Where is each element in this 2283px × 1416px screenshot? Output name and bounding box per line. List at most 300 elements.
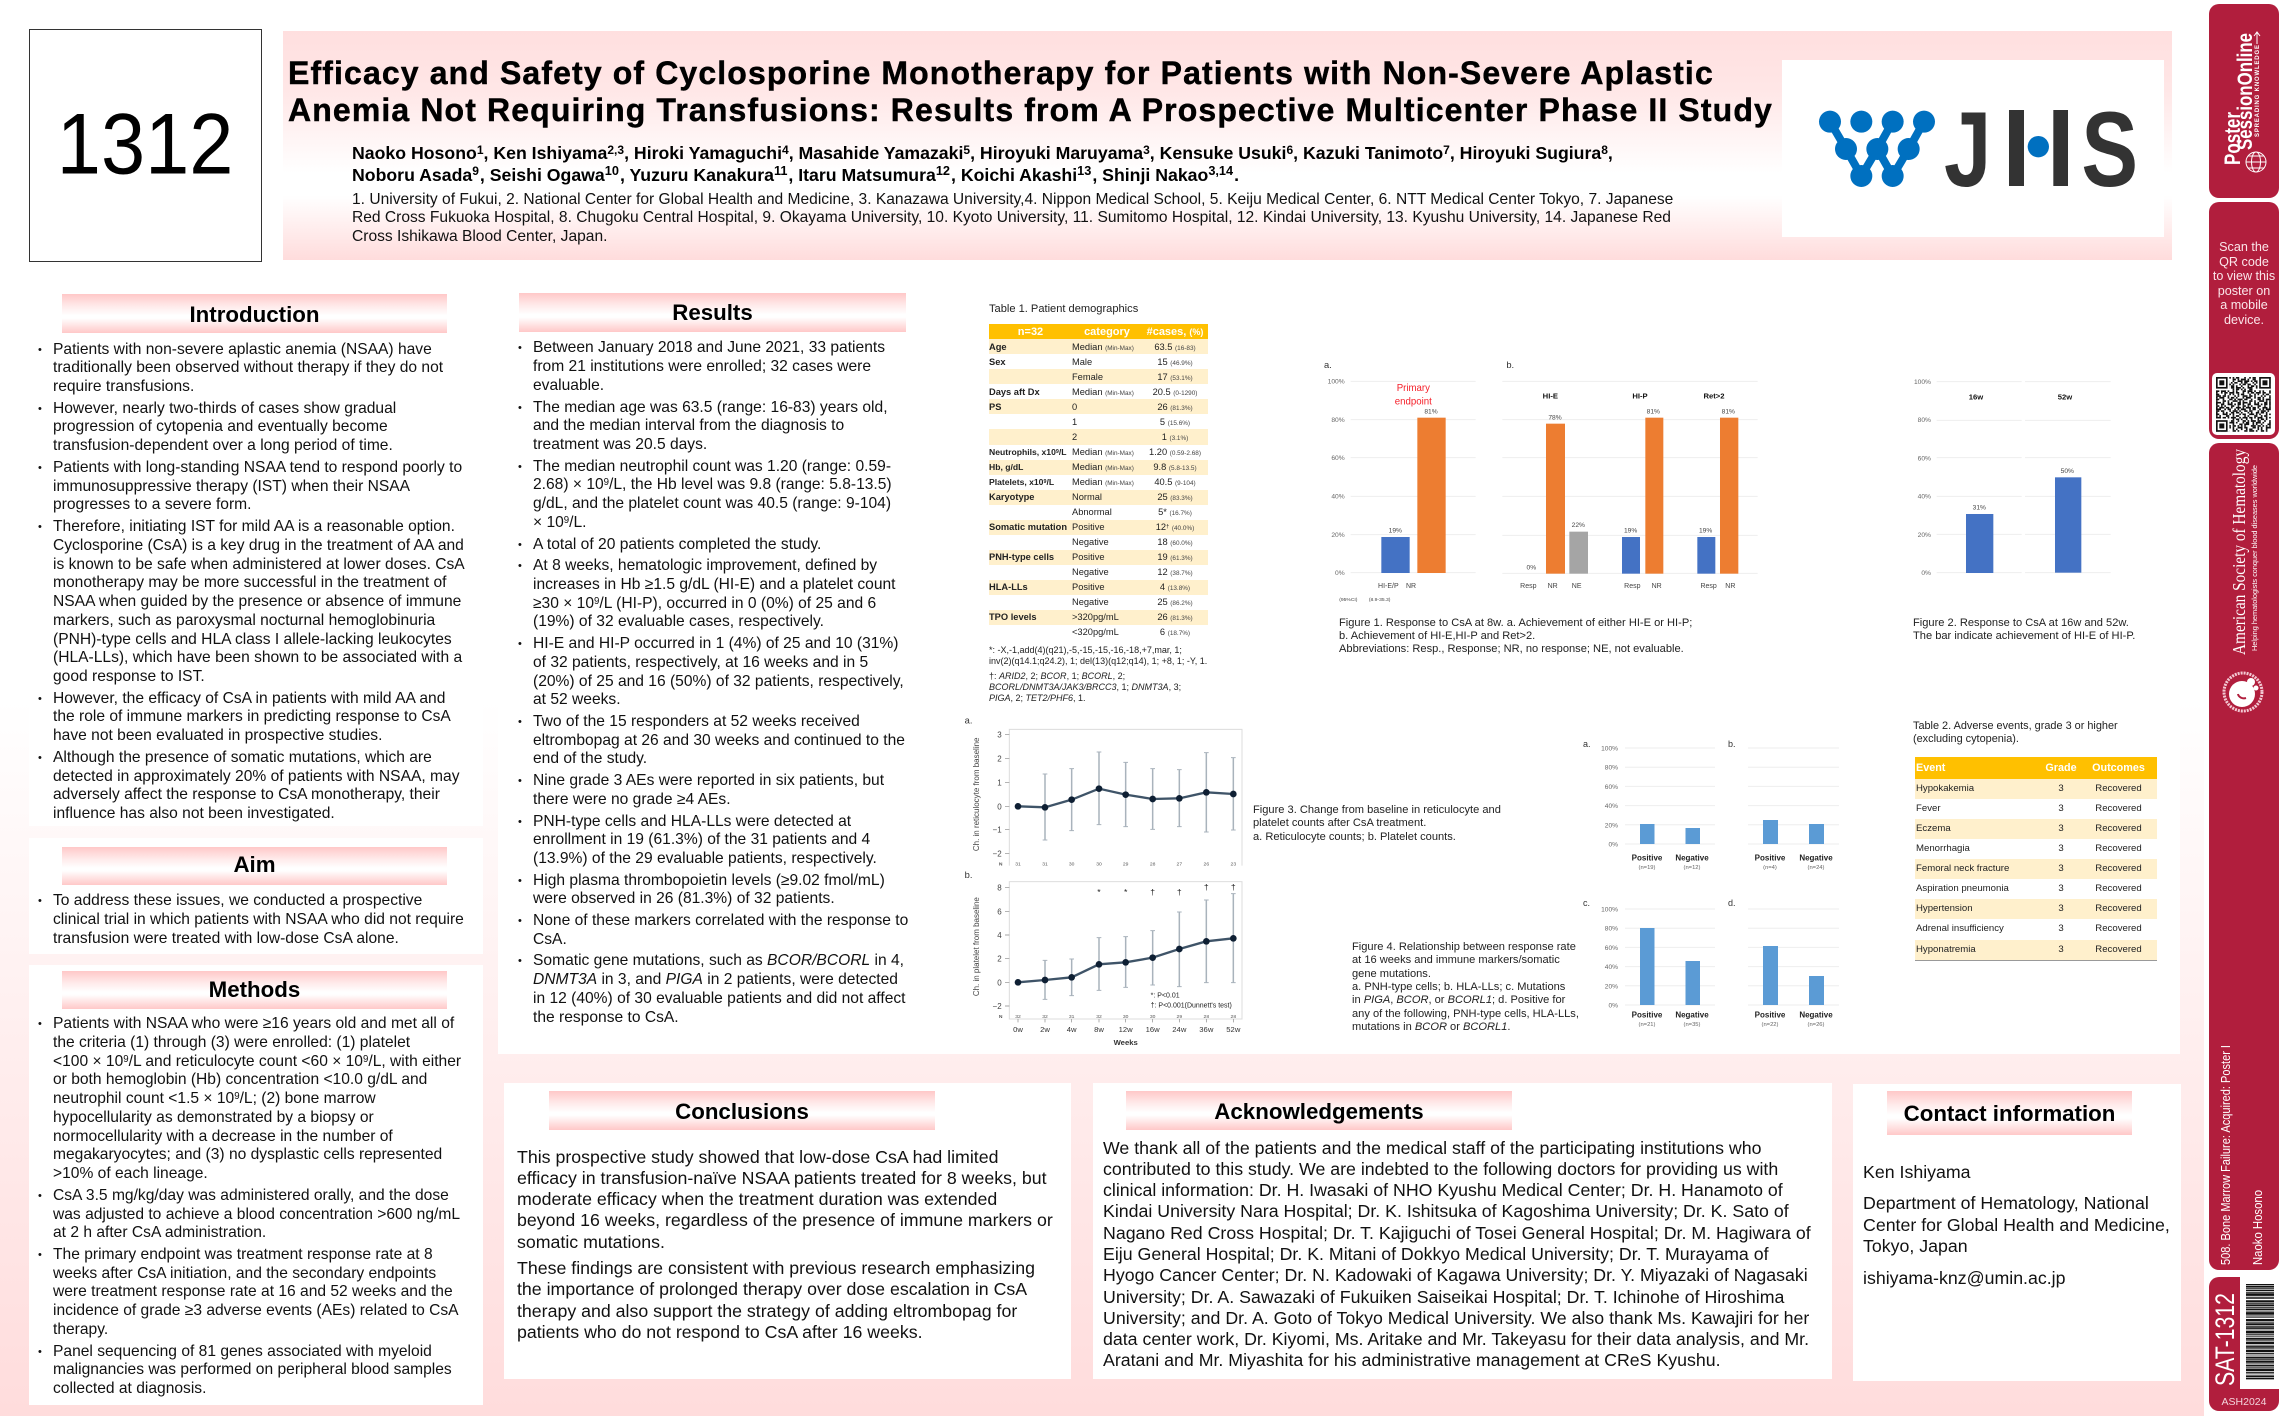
text: introduction bullets: Cyclosporine (CsA) is a key drug in the treatment of AA and (53, 537, 464, 554)
figure 4c: gene mutations response: c. (1583, 898, 1590, 908)
table 1: patient demographics: Median (Min-Max) (1072, 387, 1134, 397)
panel: conclusions (504, 1083, 1071, 1379)
sidebar: QR scan tab: to view this (2213, 269, 2275, 283)
table 1: patient demographics: 12† (40.0%) (1156, 522, 1194, 532)
figure 1a: primary endpoint bar chart: 80% (1331, 417, 1345, 424)
table 2: adverse events: 3 (2058, 903, 2064, 914)
text: methods bullets: therapy. (53, 1321, 108, 1338)
text: introduction bullets: have not been evaluated in prospective studies. (53, 727, 382, 744)
table 2 title (1913, 720, 2118, 745)
table 1: patient demographics: Karyotype (989, 492, 1034, 502)
icon: JHS logo: S (2081, 89, 2138, 209)
sidebar: American Society of Hematology tab: Naoko Hosono (2250, 1190, 2265, 1265)
table 1: patient demographics: 25 (86.2%) (1157, 597, 1193, 607)
text: results bullets: HI-E and HI-P occurred in 1 (4%) of 25 and 10 (31%) (533, 635, 898, 652)
text: methods bullets: megakaryocytes; and (3) no dysplastic cells represented (53, 1146, 442, 1163)
figure 3b: platelet change line chart: 52w (1226, 1025, 1241, 1034)
figure 3 caption: Figure 3. Change from baseline in reticulocyte and (1253, 804, 1501, 816)
figure 3a: reticulocyte change line chart: 30 (1069, 862, 1075, 868)
text: introduction bullets: markers, such as paroxysmal nocturnal hemoglobinuria (53, 612, 435, 629)
figure 2: response at 16w and 52w: 80% (1918, 417, 1931, 424)
text: introduction bullets: immunosuppressive therapy (IST) when their NSAA (53, 478, 410, 495)
figure 3a: reticulocyte change line chart: 28 (1150, 862, 1156, 868)
text: acknowledgements: Aratani and Mr. Miyashita for his administrative management at CReS Kyushu. (1103, 1350, 1721, 1370)
figure 3b: platelet change line chart: Weeks (1114, 1038, 1138, 1047)
figure 4b: HLA-LLs response (1728, 739, 1839, 871)
abstract number box: 1312 (57, 97, 234, 193)
text: conclusions: therapy and also support the strategy of adding eltrombopag for (517, 1301, 1017, 1321)
text: results bullets: g/dL, and the platelet count was 40.5 (range: 9-104) (533, 495, 891, 512)
text: results bullets: × 109/L. (533, 514, 587, 531)
figure 1a: primary endpoint bar chart: 19% (1389, 528, 1402, 535)
table 1: patient demographics: HLA-LLs (989, 582, 1028, 592)
figure 2: response at 16w and 52w (1914, 379, 2111, 577)
figure 3a: reticulocyte change line chart (965, 716, 1242, 868)
figure 3b: platelet change line chart: −2 (993, 1002, 1002, 1011)
text: results bullets: at 52 weeks. (533, 691, 621, 708)
table 1 footnotes: inv(2)(q14.1;q24.2), 1; del(13)(q12;q14), 1; +8, 1; -Y, 1. †: ARID2, 2; BCOR, 1; BCORL, 2; (989, 656, 1207, 681)
figure 3b: platelet change line chart: 32 (1042, 1014, 1048, 1020)
figure 1b: HI-E, HI-P, Ret>2 bar chart: NR (1725, 583, 1735, 590)
table 2: adverse events: Hypertension (1916, 903, 1973, 914)
figure 1b: HI-E, HI-P, Ret>2 bar chart: Resp (1701, 583, 1717, 590)
text: contact details: Ken Ishiyama Department of Hematology, National (1863, 1162, 2149, 1213)
text: results bullets: (20%) of 25 and 16 (50%) of 32 patients, respectively, (533, 673, 904, 690)
text: acknowledgements: University; Dr. A. Sawazaki of Fukuiken Saiseikai Hospital; Dr. T. Ichinohe of Hiroshima (1103, 1287, 1784, 1307)
text: results bullets: increases in Hb ≥1.5 g/dL (HI-E) and a platelet count (533, 576, 896, 593)
figure 2: response at 16w and 52w: 100% (1914, 379, 1931, 386)
title (288, 54, 1773, 128)
sidebar: American Society of Hematology tab: American Society of Hematology (2229, 449, 2249, 655)
text: introduction bullets: monotherapy may be more successful in the treatment of (53, 574, 446, 591)
sidebar: QR scan tab (2209, 202, 2279, 439)
heading: Methods (62, 971, 447, 1009)
table 2 title: (excluding cytopenia). (1913, 733, 2019, 745)
figure 3b: platelet change line chart: 30 (1150, 1014, 1156, 1020)
table 2: adverse events: Eczema (1916, 823, 1951, 834)
figure 4c: gene mutations response: Negative (1675, 1010, 1709, 1020)
table 1: patient demographics: 6 (18.7%) (1160, 627, 1190, 637)
table 1: patient demographics: 18 (60.0%) (1157, 537, 1193, 547)
figure 1b: HI-E, HI-P, Ret>2 bar chart: NR (1548, 583, 1558, 590)
table 1: patient demographics: Negative (1072, 567, 1109, 577)
sidebar: PosterSessionOnline tab: SPREADING KNOWLEDGE (2255, 45, 2261, 137)
text: introduction bullets: Patients with long-standing NSAA tend to respond poorly to (53, 459, 462, 476)
figure 3b: platelet change line chart: * (1124, 887, 1128, 897)
text: results bullets: CsA. (533, 931, 567, 948)
figure 3b: platelet change line chart: † (1150, 887, 1155, 897)
text: results bullets: treatment was 20.5 days. (533, 436, 707, 453)
text: methods bullets: incidence of grade ≥3 adverse events (AEs) related to CsA (53, 1302, 459, 1319)
sidebar: American Society of Hematology tab: 508. Bone Marrow Failure: Acquired: Poster I (2218, 1045, 2233, 1265)
text: results bullets: enrollment in 19 (61.3%) of the 31 patients and 4 (533, 831, 870, 848)
table 1: patient demographics: Neutrophils, x109/L (989, 447, 1066, 457)
text: results bullets: Between January 2018 and June 2021, 33 patients (533, 339, 885, 356)
table 1: patient demographics: Platelets, x109/L (989, 477, 1054, 487)
figure 4c: gene mutations response: (n=21) (1639, 1022, 1656, 1028)
figure 3b: platelet change line chart: b. (965, 870, 972, 880)
figure 4c: gene mutations response: Positive (1632, 1010, 1663, 1020)
table 1: patient demographics: Positive (1072, 522, 1105, 532)
table 2: adverse events: Recovered (2095, 823, 2142, 834)
table 2: adverse events: Grade (2045, 762, 2077, 774)
text: results bullets: Two of the 15 responders at 52 weeks received (533, 713, 860, 730)
figure 1b: HI-E, HI-P, Ret>2 bar chart: Ret>2 (1703, 392, 1725, 401)
text: introduction bullets: progression of cytopenia and eventually become (53, 418, 388, 435)
figure 3b: platelet change line chart: N (999, 1014, 1003, 1020)
figure 4c: gene mutations response: 60% (1605, 945, 1618, 952)
table 1: patient demographics: 1 (1072, 417, 1077, 427)
text: acknowledgements: University; and Dr. A. Goto of Tokyo Medical University. We also thank Ms. Kawajiri for her (1103, 1308, 1809, 1328)
text: results bullets: evaluable. (533, 377, 604, 394)
figure 1a: primary endpoint bar chart: 0% (1335, 570, 1345, 577)
text: introduction bullets: require transfusions. (53, 378, 194, 395)
table 2: adverse events: 3 (2058, 944, 2064, 954)
figure 3b: platelet change line chart: 28 (1231, 1014, 1236, 1020)
icon: QR code (2216, 377, 2271, 432)
table 1: patient demographics: <320pg/mL (1072, 627, 1119, 637)
figure 3a: reticulocyte change line chart: 3 (997, 731, 1002, 740)
table 1: patient demographics: 2 (1072, 432, 1077, 442)
heading: Acknowledgements (1126, 1091, 1512, 1130)
figure 1b: HI-E, HI-P, Ret>2 bar chart: NE (1572, 583, 1582, 590)
figure 4a: PNH-type cells response: Negative (1675, 854, 1709, 862)
table 2: adverse events: Recovered (2095, 803, 2142, 814)
table 1: patient demographics: PS (989, 402, 1001, 412)
figure 3b: platelet change line chart: 2 (997, 955, 1002, 964)
figure 1a: primary endpoint bar chart: a. (1324, 360, 1332, 370)
figure 1a: primary endpoint bar chart: HI-E/P (1378, 583, 1399, 590)
table 2: adverse events: Fever (1916, 803, 1941, 814)
table 2: adverse events: Recovered (2095, 783, 2142, 794)
panel: contact information (1853, 1084, 2181, 1381)
table 2: adverse events: Menorrhagia (1916, 843, 1970, 854)
text: acknowledgements: We thank all of the patients and the medical staff of the participating institutions who (1103, 1138, 1761, 1158)
text: results bullets: ≥30 × 109/L (HI-P), occurred in 0 (0%) of 25 and 6 (533, 595, 876, 612)
figure 4a: PNH-type cells response: a. (1583, 739, 1591, 749)
figure 1b: HI-E, HI-P, Ret>2 bar chart: 19% (1624, 528, 1637, 535)
text: results bullets: from 21 institutions were enrolled; 32 cases were (533, 358, 871, 375)
text: methods bullets: >10% of each lineage. (53, 1165, 208, 1182)
text: methods bullets: weeks after CsA initiation, and the secondary endpoints (53, 1265, 436, 1282)
text: methods bullets: normocellularity with a decrease in the number of (53, 1128, 393, 1145)
figure 1 caption: Abbreviations: Resp., Response; NR, no response; NE, not evaluable. (1339, 643, 1684, 655)
figure 3a: reticulocyte change line chart: a. (965, 716, 972, 726)
text: contact details (1863, 1162, 2170, 1288)
figure 3b: platelet change line chart: 2w (1040, 1025, 1050, 1034)
text: methods bullets: The primary endpoint was treatment response rate at 8 (53, 1246, 433, 1263)
figure 4c: gene mutations response: 20% (1605, 984, 1618, 990)
figure 1b: HI-E, HI-P, Ret>2 bar chart: HI-P (1632, 392, 1648, 401)
text: methods bullets: were treatment response rate at 16 and 52 weeks and the (53, 1283, 453, 1300)
text: acknowledgements: Kindai University Nara Hospital; Dr. K. Ishitsuka of Kagoshima University; Dr. K. Sato of (1103, 1201, 1789, 1221)
table 2: adverse events: Hypokakemia (1916, 783, 1974, 794)
text: methods bullets: hypocellularity as demonstrated by a biopsy or (53, 1109, 374, 1126)
table 2: adverse events: 3 (2058, 823, 2064, 834)
icon: JHS logo (1819, 89, 2138, 209)
figure 2 caption: Figure 2. Response to CsA at 16w and 52w. (1913, 616, 2129, 628)
table 2: adverse events: 3 (2058, 863, 2064, 874)
text: results bullets: The median age was 63.5 (range: 16-83) years old, (533, 399, 888, 416)
figure 2 caption (1913, 616, 2135, 642)
table 1: patient demographics: PNH-type cells (989, 552, 1054, 562)
table 2: adverse events: Outcomes (2092, 762, 2145, 774)
figure 1b: HI-E, HI-P, Ret>2 bar chart: 81% (1722, 409, 1735, 416)
text: results bullets: DNMT3A in 3, and PIGA in 2 patients, were detected (533, 971, 898, 988)
authors (352, 143, 1613, 184)
figure 3b: platelet change line chart (965, 870, 1242, 1047)
text: results bullets: 2.68) × 109/L, the Hb level was 9.8 (range: 5.8-13.5) (533, 476, 892, 493)
heading: Introduction: Introduction (189, 302, 320, 327)
text: results bullets (518, 339, 908, 1026)
table 1: patient demographics: Median (Min-Max) (1072, 447, 1134, 457)
figure 4d: any positive marker response: (n=26) (1808, 1022, 1825, 1028)
text: introduction bullets: traditionally been observed without therapy if they do not (53, 359, 443, 376)
sidebar: QR scan tab: Scan the (2219, 240, 2269, 254)
text: conclusions: efficacy in transfusion-naïve NSAA patients treated for 8 weeks, but (517, 1168, 1047, 1188)
figure 4c: gene mutations response (1583, 898, 1715, 1028)
figure 4 caption: any of the following, PNH-type cells, HLA-LLs, (1352, 1008, 1579, 1020)
figure 3b: platelet change line chart: † (1204, 882, 1209, 892)
table 1 title: Table 1. Patient demographics (989, 303, 1138, 315)
text: conclusions: This prospective study showed that low-dose CsA had limited (517, 1146, 998, 1166)
sidebar: QR scan tab: a mobile (2220, 298, 2268, 312)
figure 2: response at 16w and 52w: 52w (2058, 392, 2072, 401)
figure 1a: primary endpoint bar chart: endpoint (1395, 396, 1432, 407)
figure 2: response at 16w and 52w: 0% (1921, 570, 1931, 577)
sidebar: QR scan tab: poster on (2218, 284, 2270, 298)
figure 4a: PNH-type cells response: 40% (1605, 803, 1618, 810)
figure 4b: HLA-LLs response: (n=4) (1763, 865, 1777, 871)
heading: Contact information: Contact information (1904, 1101, 2115, 1126)
text: introduction bullets: progresses to a severe form. (53, 496, 251, 513)
figure 3a: reticulocyte change line chart: 31 (1015, 862, 1021, 868)
table 1: patient demographics: Normal (1072, 492, 1102, 502)
figure 4c: gene mutations response: 40% (1605, 964, 1618, 971)
text: introduction bullets: transfusion-dependent over a long period of time. (53, 437, 393, 454)
figure 3 caption: a. Reticulocyte counts; b. Platelet counts. (1253, 831, 1456, 843)
text: results bullets: (19%) of 32 evaluable cases, respectively. (533, 613, 824, 630)
figure 4c: gene mutations response: 80% (1605, 926, 1618, 932)
figure 2: response at 16w and 52w: 16w (1969, 392, 1983, 401)
table 2: adverse events: Recovered (2095, 843, 2142, 854)
figure 4d: any positive marker response: (n=22) (1762, 1022, 1779, 1028)
heading: Aim: Aim (233, 852, 276, 877)
sidebar: American Society of Hematology tab: Helping hematologists conquer blood diseases worldwide (2250, 465, 2259, 651)
table 1: patient demographics: Somatic mutation (989, 522, 1067, 532)
text: introduction bullets: influence has also not been investigated. (53, 805, 335, 822)
table 1: patient demographics: 40.5 (9-104) (1154, 477, 1196, 487)
table 1: patient demographics: Median (Min-Max) (1072, 342, 1134, 352)
figure 4b: HLA-LLs response: Positive (1755, 854, 1786, 862)
figure 1a: primary endpoint bar chart: 100% (1328, 379, 1345, 386)
text: methods bullets: neutrophil count <1.5 × 109/L; (2) bone marrow (53, 1090, 376, 1107)
icon: ASH seal (2224, 673, 2262, 711)
panel: aim (29, 838, 483, 954)
figure 4a: PNH-type cells response: (n=12) (1684, 865, 1701, 871)
icon: JHS logo: J (1944, 89, 1991, 209)
sidebar: session id and barcode: ASH2024 (2222, 1396, 2267, 1408)
figure 3b: platelet change line chart: 4w (1067, 1025, 1077, 1034)
text: results bullets: eltrombopag at 26 and 30 weeks and continued to the (533, 732, 905, 749)
figure 3b: platelet change line chart: 12w (1119, 1025, 1133, 1034)
text: results bullets: there were no grade ≥4 AEs. (533, 791, 731, 808)
panel: acknowledgements (1093, 1083, 1832, 1379)
table 2: adverse events: 3 (2058, 923, 2064, 934)
text: methods bullets: malignancies was performed on peripheral blood samples (53, 1361, 452, 1378)
figure 4 caption: gene mutations. (1352, 968, 1431, 980)
figure 4 caption: mutations in BCOR or BCORL1. (1352, 1021, 1510, 1033)
table 2: adverse events (1915, 757, 2157, 960)
table 2: adverse events: Recovered (2095, 863, 2142, 874)
text: conclusions: moderate efficacy when the treatment duration was extended (517, 1189, 997, 1209)
table 2: adverse events: Hyponatremia (1916, 944, 1976, 954)
table 2: adverse events: Recovered (2095, 903, 2142, 914)
heading: Results (519, 293, 906, 332)
text: acknowledgements: contributed to this study. We are indebted to the following doctors for providing us with (1103, 1159, 1778, 1179)
figure 3b: platelet change line chart: 29 (1177, 1014, 1182, 1020)
figure 2: response at 16w and 52w: 20% (1918, 532, 1931, 539)
figure 3a: reticulocyte change line chart: 0 (997, 802, 1002, 811)
text: methods bullets: <100 × 109/L and reticulocyte count <60 × 109/L, with either (53, 1053, 461, 1070)
table 1: patient demographics: 19 (61.3%) (1157, 552, 1193, 562)
table 1: patient demographics: 9.8 (5.8-13.5) (1153, 462, 1197, 472)
table 2: adverse events: Adrenal insufficiency (1916, 923, 2004, 934)
figure 4a: PNH-type cells response: Positive (1632, 854, 1663, 862)
panel: methods (29, 965, 483, 1405)
table 1: patient demographics: 26 (81.3%) (1157, 612, 1193, 622)
figure 4 caption: Figure 4. Relationship between response rate (1352, 941, 1576, 953)
table 1: patient demographics: 5 (15.6%) (1160, 417, 1190, 427)
sidebar: QR scan tab: QR code (2219, 255, 2269, 269)
figure 3b: platelet change line chart: 32 (1015, 1014, 1021, 1020)
figure 3b: platelet change line chart: 30 (1123, 1014, 1129, 1020)
figure 3a: reticulocyte change line chart: 27 (1177, 862, 1182, 868)
figure 4b: HLA-LLs response: (n=24) (1808, 865, 1825, 871)
text: aim bullet: clinical trial in which patients with NSAA who did not require (53, 911, 464, 928)
figure 3a: reticulocyte change line chart: −1 (993, 826, 1002, 835)
figure 4b: HLA-LLs response: Negative (1799, 854, 1833, 862)
table 2: adverse events: 3 (2058, 883, 2064, 894)
table 2: adverse events: Recovered (2095, 883, 2142, 894)
figure 4a: PNH-type cells response: 100% (1601, 746, 1618, 752)
figure 1b: HI-E, HI-P, Ret>2 bar chart: Resp (1624, 583, 1641, 590)
table 1: patient demographics: TPO levels (989, 612, 1037, 622)
text: introduction bullets: detected in approximately 20% of patients with NSAA, may (53, 768, 460, 785)
table 1: patient demographics: Abnormal (1072, 507, 1112, 517)
figure 3a: reticulocyte change line chart: 23 (1231, 862, 1236, 868)
figure 2: response at 16w and 52w: 31% (1973, 505, 1986, 512)
table 1 footnotes: *: -X,-1,add(4)(q21),-5,-15,-15,-16,-18,+7,mar, 1; (989, 644, 1182, 654)
figure 1 caption: b. Achievement of HI-E,HI-P and Ret>2. (1339, 630, 1535, 642)
heading: Results: Results (672, 300, 753, 325)
figure 3b: platelet change line chart: *: P<0.01 (1151, 993, 1180, 1000)
text: introduction bullets: Although the presence of somatic mutations, which are (53, 749, 432, 766)
text: conclusions (517, 1146, 1053, 1342)
figure 3a: reticulocyte change line chart: 2 (997, 755, 1002, 764)
figure 3b: platelet change line chart: 8 (997, 883, 1002, 892)
figure 3b: platelet change line chart: 6 (997, 907, 1002, 916)
figure 1a: primary endpoint bar chart: 20% (1331, 532, 1345, 539)
title: Anemia Not Requiring Transfusions: Results from A Prospective Multicenter Phase II Study (288, 92, 1773, 128)
table 1: patient demographics: 1 (3.1%) (1162, 432, 1188, 442)
text: results bullets: At 8 weeks, hematologic improvement, defined by (533, 557, 877, 574)
text: conclusions: the importance of prolonged therapy over dose escalation in CsA (517, 1279, 1027, 1299)
figure 4a: PNH-type cells response: 20% (1605, 822, 1618, 830)
text: methods bullets: Panel sequencing of 81 genes associated with myeloid (53, 1343, 432, 1360)
figure 3b: platelet change line chart: 0w (1013, 1025, 1023, 1034)
text: results bullets: PNH-type cells and HLA-LLs were detected at (533, 813, 851, 830)
text: introduction bullets: good response to IST. (53, 668, 205, 685)
table 1: patient demographics: 63.5 (16-83) (1154, 342, 1196, 352)
table 1: patient demographics: 4 (13.8%) (1160, 582, 1190, 592)
heading: Methods: Methods (209, 977, 300, 1002)
text: results bullets: in 12 (40%) of 30 evaluable patients and did not affect (533, 990, 906, 1007)
text: introduction bullets: Therefore, initiating IST for mild AA is a reasonable option. (53, 518, 455, 535)
text: aim bullet: To address these issues, we conducted a prospective (53, 892, 422, 909)
text: results bullets: Nine grade 3 AEs were reported in six patients, but (533, 772, 884, 789)
table 1: patient demographics: 26 (81.3%) (1157, 402, 1193, 412)
affiliations: Red Cross Fukuoka Hospital, 8. Chugoku Central Hospital, 9. Okayama University, 10. Kyoto University, 11. Sumitomo Hospital, 12. Kindai University, 13. Kyushu University, 14. Japanese Red (352, 209, 1671, 226)
figure 3 caption: platelet counts after CsA treatment. (1253, 817, 1426, 829)
text: results bullets: the response to CsA. (533, 1009, 679, 1026)
figure 1a: primary endpoint bar chart: 81% (1424, 409, 1438, 416)
table 1: patient demographics: n=32 (1018, 326, 1043, 338)
figure 3a: reticulocyte change line chart: −2 (993, 849, 1002, 858)
sidebar: American Society of Hematology tab (2209, 443, 2279, 1270)
text: conclusions: beyond 16 weeks, regardless of the presence of immune markers or (517, 1210, 1053, 1230)
text: introduction bullets: (PNH)-type cells and HLA class I allele-lacking leukocytes (53, 631, 452, 648)
table 1: patient demographics: 25 (83.3%) (1157, 492, 1193, 502)
table 2 title: Table 2. Adverse events, grade 3 or higher (1913, 720, 2118, 732)
text: results bullets: and the median interval from the diagnosis to (533, 417, 844, 434)
table 1: patient demographics: Hb, g/dL (989, 462, 1023, 472)
table 2: adverse events: Aspiration pneumonia (1916, 883, 2009, 894)
text: results bullets: High plasma thrombopoietin levels (≥9.02 fmol/mL) (533, 872, 885, 889)
text: contact details: Center for Global Health and Medicine, (1863, 1215, 2170, 1235)
table 2: adverse events: Femoral neck fracture (1916, 863, 2009, 874)
abstract number box (29, 29, 262, 262)
figure 1a: primary endpoint bar chart: NR (1406, 583, 1416, 590)
figure 1b: HI-E, HI-P, Ret>2 bar chart: 19% (1699, 528, 1712, 535)
figure 4a: PNH-type cells response: (n=19) (1639, 865, 1656, 871)
text: methods bullets: collected at diagnosis. (53, 1380, 206, 1397)
table 1 footnotes: BCORL/DNMT3A/JAK3/BRCC3, 1; DNMT3A, 3; (989, 682, 1181, 692)
figure 3b: platelet change line chart: † (1231, 882, 1236, 892)
text: results bullets: The median neutrophil count was 1.20 (range: 0.59- (533, 458, 891, 475)
table 1: patient demographics: category (1084, 326, 1130, 338)
figure 4c: gene mutations response: 0% (1608, 1002, 1618, 1010)
text: results bullets: None of these markers correlated with the response to (533, 912, 908, 929)
text: methods bullets: or both hemoglobin (Hb) concentration <10.0 g/dL and (53, 1071, 427, 1088)
heading: Conclusions (549, 1091, 935, 1130)
text: introduction bullets (38, 341, 465, 822)
text: introduction bullets: (HLA-LLs), which have been shown to be associated with a (53, 649, 462, 666)
figure 3 caption (1253, 804, 1501, 843)
figure 2: response at 16w and 52w: 40% (1918, 494, 1931, 501)
table 1: patient demographics: Age (989, 342, 1007, 352)
figure 1b: HI-E, HI-P, Ret>2 bar chart: 0% (1527, 564, 1536, 571)
table 1: patient demographics: 0 (1072, 402, 1077, 412)
table 1: patient demographics: Negative (1072, 537, 1109, 547)
table 1: patient demographics (989, 324, 1208, 637)
table 1: patient demographics: Days aft Dx (989, 387, 1040, 397)
figure 3a: reticulocyte change line chart: 31 (1042, 862, 1048, 868)
text: acknowledgements: Eiju General Hospital; Dr. K. Mitani of Dokkyo Medical University; Dr. T. Murayama of (1103, 1244, 1769, 1264)
figure 1b: HI-E, HI-P, Ret>2 bar chart: 22% (1572, 522, 1585, 529)
table 2: adverse events: 3 (2058, 803, 2064, 814)
text: results bullets: Somatic gene mutations, such as BCOR/BCORL in 4, (533, 952, 904, 969)
